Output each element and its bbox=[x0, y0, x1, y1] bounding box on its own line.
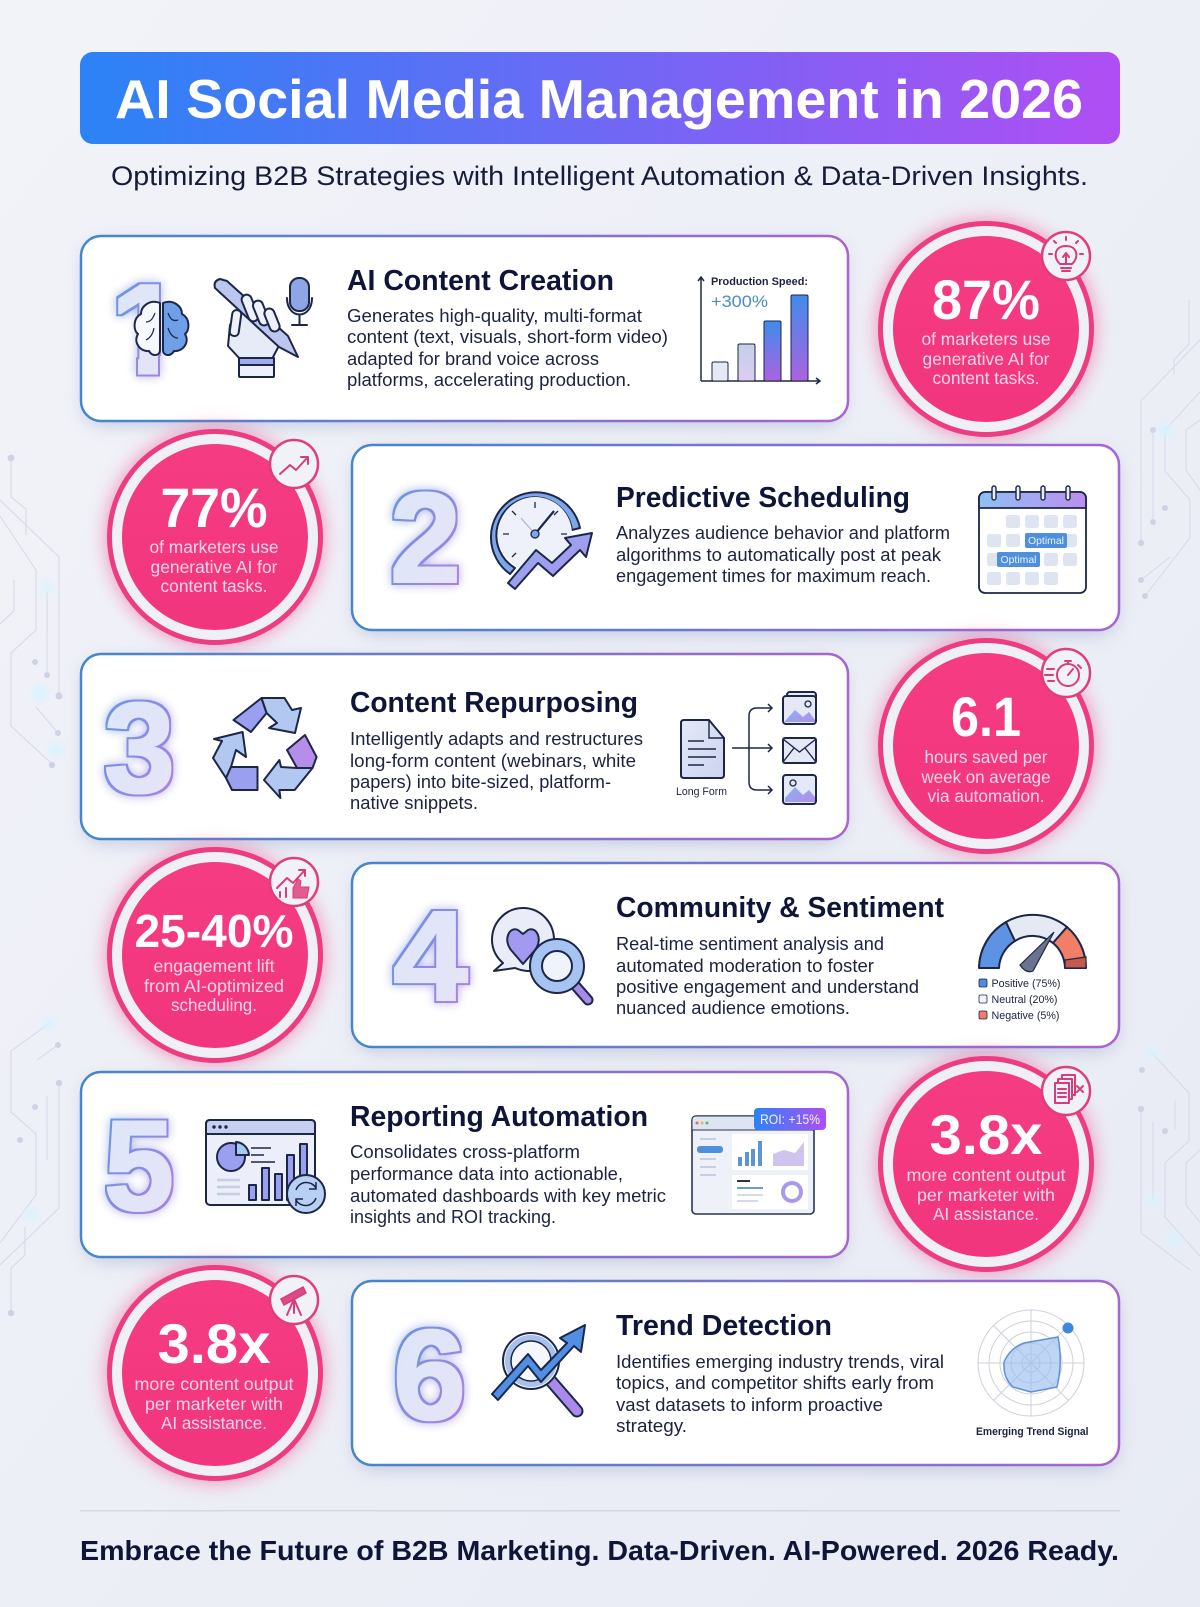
stat circle: 87%: 87% bbox=[932, 268, 1040, 331]
description: vast datasets to inform proactive bbox=[616, 1395, 883, 1415]
icon: stopwatch badge bbox=[1042, 649, 1090, 697]
description: nuanced audience emotions. bbox=[616, 998, 850, 1018]
stat circle: 3.8x output (right) bbox=[876, 1054, 1096, 1274]
panel: Predictive Scheduling bbox=[352, 445, 1119, 634]
description: adapted for brand voice across bbox=[347, 349, 599, 369]
dashboard mockup with ROI badge bbox=[692, 1108, 826, 1214]
number 1 with brain bbox=[110, 276, 190, 382]
description: papers) into bite-sized, platform- bbox=[350, 772, 611, 792]
number 3: 3 bbox=[104, 677, 175, 820]
stat circle: 77%: 77% bbox=[160, 476, 268, 539]
radar chart: emerging trend signal: Emerging Trend Signal bbox=[976, 1426, 1088, 1438]
icon: dashboard with sync bbox=[206, 1120, 325, 1213]
stat circle: 6.1: week on average bbox=[921, 767, 1050, 787]
icon: lightbulb badge bbox=[1042, 232, 1090, 280]
description: native snippets. bbox=[350, 793, 478, 813]
description bbox=[616, 1352, 944, 1436]
title banner bbox=[80, 52, 1120, 144]
stat circle: 3.8x output (right): AI assistance. bbox=[933, 1204, 1039, 1224]
description: automated dashboards with key metric bbox=[350, 1186, 666, 1206]
stat circle: 25-40%: from AI-optimized bbox=[144, 976, 284, 996]
icon: chart and thumbs up badge bbox=[270, 858, 318, 906]
panel: Trend Detection bbox=[352, 1281, 1119, 1469]
calendar with optimal slots: Optimal bbox=[1028, 535, 1064, 547]
stat circle: 3.8x output (left): more content output bbox=[134, 1374, 294, 1394]
number 6: 6 bbox=[393, 1304, 466, 1447]
stat circle: 3.8x output (left): per marketer with bbox=[145, 1394, 283, 1414]
heading: Content Repurposing bbox=[350, 687, 638, 719]
description bbox=[616, 934, 919, 1018]
stat circle: 3.8x output (left): AI assistance. bbox=[161, 1413, 267, 1433]
icon: magnifier with trend arrow bbox=[492, 1325, 585, 1411]
stat circle: 77% bbox=[105, 427, 325, 647]
icon: trend arrow badge bbox=[270, 440, 318, 488]
panel: Content Repurposing bbox=[81, 654, 848, 843]
icon: telescope badge bbox=[270, 1276, 318, 1324]
description: Identifies emerging industry trends, viral bbox=[616, 1352, 944, 1372]
description: algorithms to automatically post at peak bbox=[616, 545, 942, 565]
description: Analyzes audience behavior and platform bbox=[616, 523, 950, 543]
description bbox=[616, 523, 950, 586]
description: Intelligently adapts and restructures bbox=[350, 729, 643, 749]
panel: Community & Sentiment bbox=[352, 863, 1119, 1051]
stat circle: 3.8x output (left): 3.8x bbox=[158, 1312, 270, 1375]
description: automated moderation to foster bbox=[616, 956, 874, 976]
radar chart: emerging trend signal bbox=[976, 1310, 1088, 1438]
gauge with legend: Neutral (20%) bbox=[992, 994, 1058, 1006]
diagram: long form to snippets bbox=[676, 692, 816, 804]
description: topics, and competitor shifts early from bbox=[616, 1373, 934, 1393]
heading: Community & Sentiment bbox=[616, 892, 944, 924]
left circuit decoration bbox=[0, 454, 63, 1316]
stat circle: 87% bbox=[876, 219, 1096, 439]
description: platforms, accelerating production. bbox=[347, 370, 631, 390]
subtitle: Optimizing B2B Strategies with Intelligent Automation & Data-Driven Insights. bbox=[111, 161, 1088, 191]
heading: Trend Detection bbox=[616, 1310, 832, 1342]
description: engagement times for maximum reach. bbox=[616, 566, 931, 586]
stat circle: 77%: generative AI for bbox=[150, 557, 278, 577]
number 2: 2 bbox=[390, 467, 461, 610]
stat circle: 3.8x output (left) bbox=[105, 1263, 325, 1483]
description: performance data into actionable, bbox=[350, 1164, 623, 1184]
description bbox=[347, 306, 668, 390]
right circuit decoration bbox=[1138, 300, 1200, 1270]
description: Real-time sentiment analysis and bbox=[616, 934, 884, 954]
heading: Predictive Scheduling bbox=[616, 482, 910, 514]
dashboard mockup with ROI badge: ROI: +15% bbox=[760, 1111, 820, 1127]
stat circle: 87%: content tasks. bbox=[932, 368, 1040, 388]
gauge with legend bbox=[979, 915, 1086, 1022]
calendar with optimal slots bbox=[979, 486, 1086, 593]
stat circle: 25-40% bbox=[105, 845, 325, 1065]
bar chart: production speed: +300% bbox=[711, 292, 768, 311]
stat circle: 87%: generative AI for bbox=[922, 349, 1050, 369]
description: long-form content (webinars, white bbox=[350, 751, 636, 771]
description: Consolidates cross-platform bbox=[350, 1142, 580, 1162]
footer rule bbox=[80, 1510, 1120, 1512]
stat circle: 6.1: 6.1 bbox=[951, 685, 1021, 748]
stat circle: 25-40%: engagement lift bbox=[154, 956, 275, 976]
description: insights and ROI tracking. bbox=[350, 1207, 556, 1227]
stat circle: 25-40%: scheduling. bbox=[171, 995, 257, 1015]
description: content (text, visuals, short-form video) bbox=[347, 327, 668, 347]
panel: AI Content Creation bbox=[81, 236, 848, 425]
icon: clock with rising arrow bbox=[491, 492, 592, 589]
stat circle: 77%: content tasks. bbox=[160, 576, 268, 596]
stat circle: 6.1: via automation. bbox=[928, 786, 1044, 806]
bar chart: production speed: Production Speed: bbox=[711, 276, 808, 288]
description: positive engagement and understand bbox=[616, 977, 919, 997]
icon: documents badge bbox=[1042, 1067, 1090, 1115]
number 4: 4 bbox=[393, 885, 468, 1028]
stat circle: 77%: of marketers use bbox=[150, 537, 278, 557]
stat circle: 3.8x output (right): more content output bbox=[906, 1165, 1066, 1185]
heading: AI Content Creation bbox=[347, 265, 614, 297]
description bbox=[350, 1142, 666, 1227]
stat circle: 25-40%: 25-40% bbox=[134, 905, 294, 957]
icon: chat bubble and magnifier bbox=[492, 908, 588, 1000]
panel: Reporting Automation bbox=[81, 1072, 848, 1261]
stat circle: 6.1: hours saved per bbox=[924, 747, 1048, 767]
icon: recycle arrows bbox=[213, 698, 317, 798]
number 5: 5 bbox=[104, 1095, 174, 1238]
description bbox=[350, 729, 643, 813]
stat circle: 87%: of marketers use bbox=[922, 329, 1050, 349]
gauge with legend: Positive (75%) bbox=[992, 978, 1060, 990]
stat circle: 6.1 bbox=[876, 636, 1096, 856]
calendar with optimal slots: Optimal bbox=[1000, 554, 1036, 566]
diagram: long form to snippets: Long Form bbox=[676, 786, 727, 798]
stat circle: 3.8x output (right): 3.8x bbox=[930, 1103, 1042, 1166]
title banner: AI Social Media Management in 2026 bbox=[115, 68, 1083, 130]
number 1 with brain: 1 bbox=[110, 258, 182, 402]
footer tagline: Embrace the Future of B2B Marketing. Data-Driven. AI-Powered. 2026 Ready. bbox=[80, 1535, 1119, 1566]
bar chart: production speed bbox=[698, 276, 820, 384]
description: strategy. bbox=[616, 1416, 687, 1436]
description: Generates high-quality, multi-format bbox=[347, 306, 642, 326]
heading: Reporting Automation bbox=[350, 1101, 648, 1133]
icon: robot hand with pen and microphone bbox=[215, 278, 312, 377]
gauge with legend: Negative (5%) bbox=[992, 1010, 1060, 1022]
stat circle: 3.8x output (right): per marketer with bbox=[917, 1185, 1055, 1205]
